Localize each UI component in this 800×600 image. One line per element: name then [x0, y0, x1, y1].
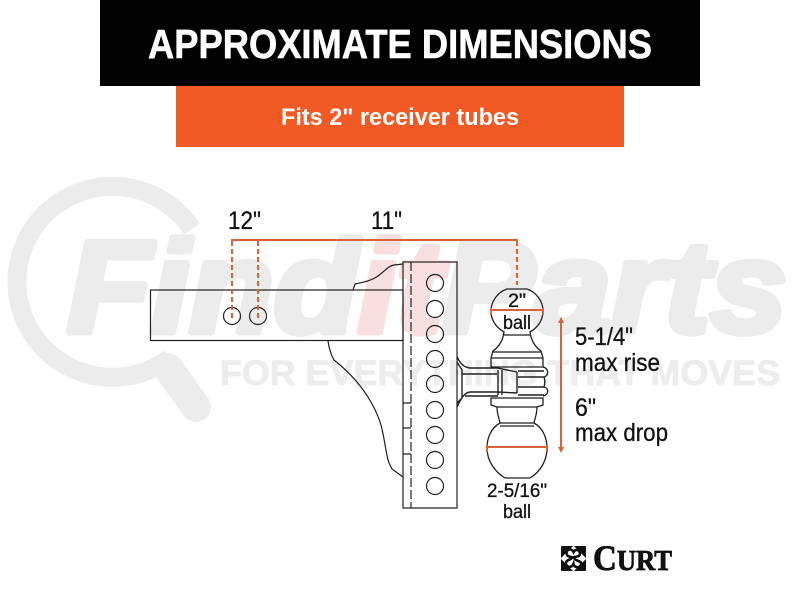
lower ball: 2-5/16 inch: [487, 398, 547, 478]
label: lower ball: ball: [503, 502, 531, 523]
label: 2-5/16 inch: 2-5/16": [487, 481, 547, 502]
hitch line drawing: [150, 262, 548, 508]
upper ball diameter: [491, 308, 543, 315]
label: rise value: 5-1/4": [575, 323, 633, 351]
label: 2 inch: 2": [508, 291, 526, 312]
label: 11 inch: 11": [371, 207, 402, 235]
receiver shank: [150, 290, 403, 340]
title: APPROXIMATE DIMENSIONS: [148, 21, 652, 67]
ball mount arms: [457, 357, 517, 407]
label: max drop: max drop: [575, 419, 668, 447]
watermark: magnifier and brand: [17, 186, 787, 407]
dashed drop: 11 inch ball center: [516, 241, 518, 285]
watermark: brand word: FinditParts: [67, 214, 787, 360]
dashed drop: 12 inch holes: [232, 241, 258, 320]
lower gusset: [328, 341, 403, 477]
label: max rise: max rise: [575, 349, 660, 377]
width bracket: [232, 240, 517, 241]
subtitle banner: [176, 86, 624, 147]
subtitle: Fits 2" receiver tubes: [281, 104, 519, 131]
dimension lines: [232, 240, 564, 453]
title banner: [100, 0, 700, 86]
wordmark: CURT: [593, 538, 672, 578]
label: 12 inch: 12": [228, 207, 261, 235]
CURT logo: [561, 538, 672, 578]
lower ball diameter: [487, 445, 547, 452]
vertical rise and drop arrow: [558, 317, 564, 453]
watermark: magnifier ring: [17, 186, 192, 377]
watermark: magnifier handle: [168, 368, 196, 407]
drilled plate: [403, 262, 457, 508]
label: upper ball: ball: [503, 313, 531, 334]
label: drop value: 6": [575, 394, 596, 422]
dimension labels: [228, 207, 668, 523]
watermark: tagline: FOR EVERYTHING THAT MOVES: [220, 354, 780, 393]
shaft with rings: [518, 367, 548, 396]
upper ball: 2 inch: [491, 289, 543, 367]
upper gusset: [353, 264, 403, 290]
icon: knot mark: [561, 546, 586, 571]
